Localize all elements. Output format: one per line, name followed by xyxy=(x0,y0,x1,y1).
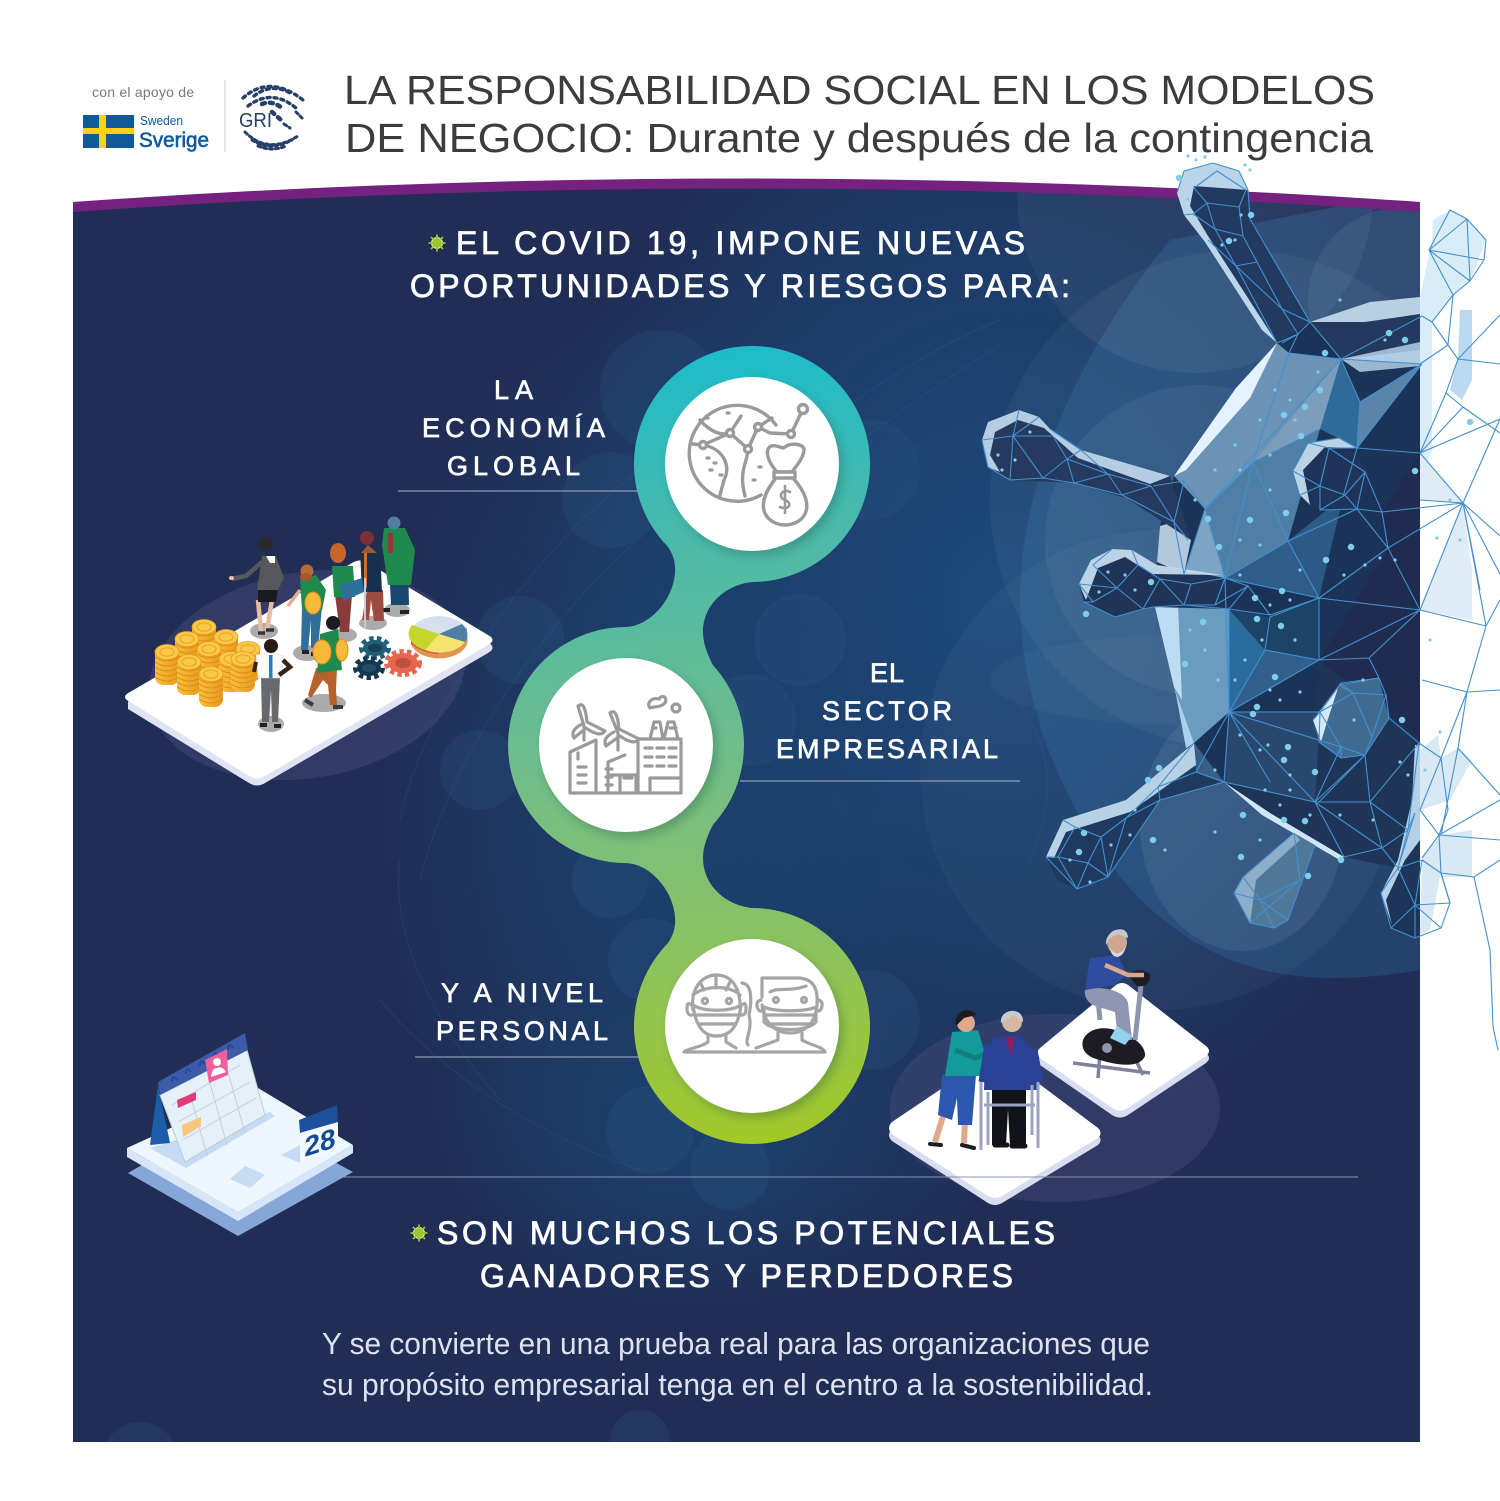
heading: son muchos los potenciales: GANADORES Y PERDEDORES xyxy=(480,1258,1013,1294)
arm left xyxy=(990,420,1191,540)
virus particles xyxy=(998,156,1470,882)
label: Y a nivel personal xyxy=(415,978,640,1057)
title: LA RESPONSABILIDAD SOCIAL EN LOS MODELOS xyxy=(344,67,1375,113)
label: La economía global xyxy=(398,375,638,491)
label: La economía global: ECONOMÍA xyxy=(422,413,605,443)
title xyxy=(344,67,1375,161)
right low spike xyxy=(1385,862,1420,937)
woman with coins xyxy=(305,616,348,707)
nurse xyxy=(930,1010,990,1148)
arm mid xyxy=(1079,549,1229,617)
virus body inside panel xyxy=(982,163,1422,938)
heading: El COVID 19: EL COVID 19, IMPONE NUEVAS xyxy=(456,225,1025,261)
logo: Sweden Sverige xyxy=(83,113,209,152)
woman in suit xyxy=(231,537,284,633)
label: El sector empresarial: EL xyxy=(870,658,904,688)
illustration: economy platform with people and coins xyxy=(125,516,492,786)
pale facets outside panel xyxy=(1420,210,1486,935)
logo: GRI globe: GRI xyxy=(239,110,272,132)
label: El sector empresarial xyxy=(740,658,1020,781)
title: DE NEGOCIO: Durante y después de la contingencia xyxy=(345,115,1373,161)
coin stacks xyxy=(155,620,260,707)
green coat man xyxy=(381,516,415,612)
woman with bag xyxy=(330,543,364,632)
label: Y a nivel personal: Y A NIVEL xyxy=(441,978,603,1008)
people xyxy=(231,516,415,732)
illustration: calendar platform xyxy=(127,1033,353,1236)
text block: closing paragraph: Y se convierte en una prueba real para las organizaciones que xyxy=(322,1326,1150,1361)
logo: con el apoyo de: con el apoyo de xyxy=(92,84,194,100)
man with tie xyxy=(254,639,290,726)
gears and pie chart xyxy=(357,616,468,676)
logo: Sweden Sverige: Sverige xyxy=(139,129,209,152)
label: La economía global: GLOBAL xyxy=(447,451,580,481)
upper right arm xyxy=(1310,297,1420,359)
small knob upper xyxy=(1293,462,1343,510)
icon: wind turbines and factory xyxy=(570,696,681,793)
woman with cane xyxy=(360,531,384,628)
heading: El COVID 19 xyxy=(410,225,1070,304)
logo: GRI globe xyxy=(239,86,303,149)
text block: closing paragraph xyxy=(322,1326,1153,1402)
wire mesh lines xyxy=(982,163,1463,938)
panel: main navy background xyxy=(73,178,1420,1442)
bottom spike xyxy=(1250,833,1315,928)
label: La economía global: LA xyxy=(494,375,533,405)
elderly man with walker xyxy=(981,1011,1040,1150)
bearded man xyxy=(288,564,326,654)
label: El sector empresarial: SECTOR xyxy=(822,696,952,726)
illustration: virus mesh xyxy=(982,156,1500,1050)
logo: Sweden Sverige: Sweden xyxy=(140,113,183,128)
top spike xyxy=(1177,163,1310,343)
small knob lower xyxy=(1313,678,1389,758)
label: El sector empresarial: EMPRESARIAL xyxy=(776,734,998,764)
icon: two people with masks xyxy=(684,975,825,1052)
arm low xyxy=(1046,743,1224,889)
heading: El COVID 19: OPORTUNIDADES Y RIESGOS PARA: xyxy=(410,268,1070,304)
heading: son muchos los potenciales: SON MUCHOS LOS POTENCIALES xyxy=(437,1215,1055,1251)
divider line xyxy=(340,1176,1358,1178)
illustration: elderly care platforms xyxy=(889,929,1209,1205)
date number: 28 xyxy=(304,1123,336,1164)
label: Y a nivel personal: PERSONAL xyxy=(436,1016,608,1046)
icon: globe and money bag xyxy=(689,404,808,525)
heading: son muchos los potenciales xyxy=(410,1215,1055,1294)
text block: closing paragraph: su propósito empresarial tenga en el centro a la sostenibilidad. xyxy=(322,1367,1153,1402)
chart: connected rings xyxy=(508,346,870,1144)
man on exercise bike xyxy=(1073,929,1150,1078)
